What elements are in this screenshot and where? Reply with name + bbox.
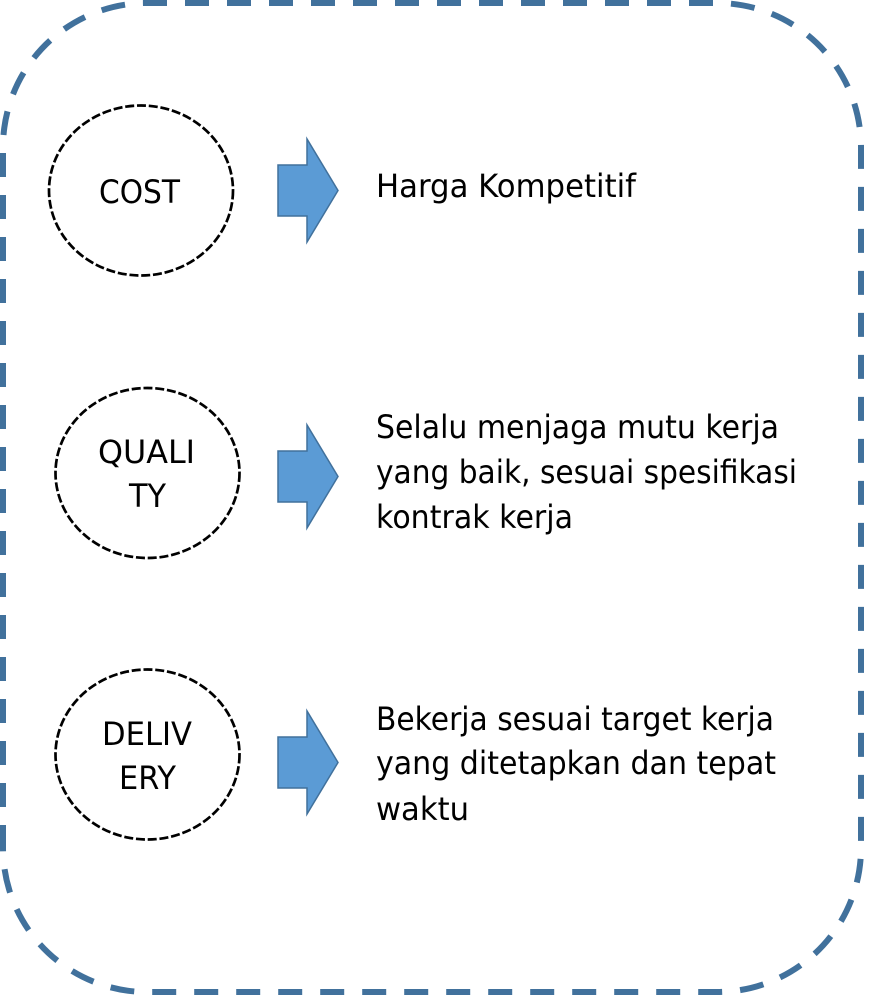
text: cost description: Harga Kompetitif	[376, 167, 637, 205]
circle: cost	[49, 106, 233, 276]
circle: delivery: DELIV	[102, 715, 192, 753]
arrow: cost	[278, 139, 338, 242]
circle: cost: COST	[99, 173, 180, 211]
arrow: quality	[278, 425, 338, 528]
circle: delivery	[56, 670, 240, 840]
text: delivery description: yang ditetapkan dan tepat	[376, 744, 776, 782]
circle: quality: QUALI	[98, 433, 195, 471]
circle: quality: TY	[128, 477, 166, 515]
arrow: delivery	[278, 711, 338, 814]
text: quality description: kontrak kerja	[376, 498, 573, 536]
text: quality description: Selalu menjaga mutu kerja	[376, 408, 779, 446]
text: quality description	[376, 408, 797, 536]
circle: delivery: ERY	[119, 759, 176, 797]
text: quality description: yang baik, sesuai spesifikasi	[376, 453, 797, 491]
circle: quality	[56, 388, 240, 558]
text: delivery description: waktu	[376, 790, 469, 828]
text: delivery description: Bekerja sesuai target kerja	[376, 700, 774, 738]
text: delivery description	[376, 700, 776, 828]
